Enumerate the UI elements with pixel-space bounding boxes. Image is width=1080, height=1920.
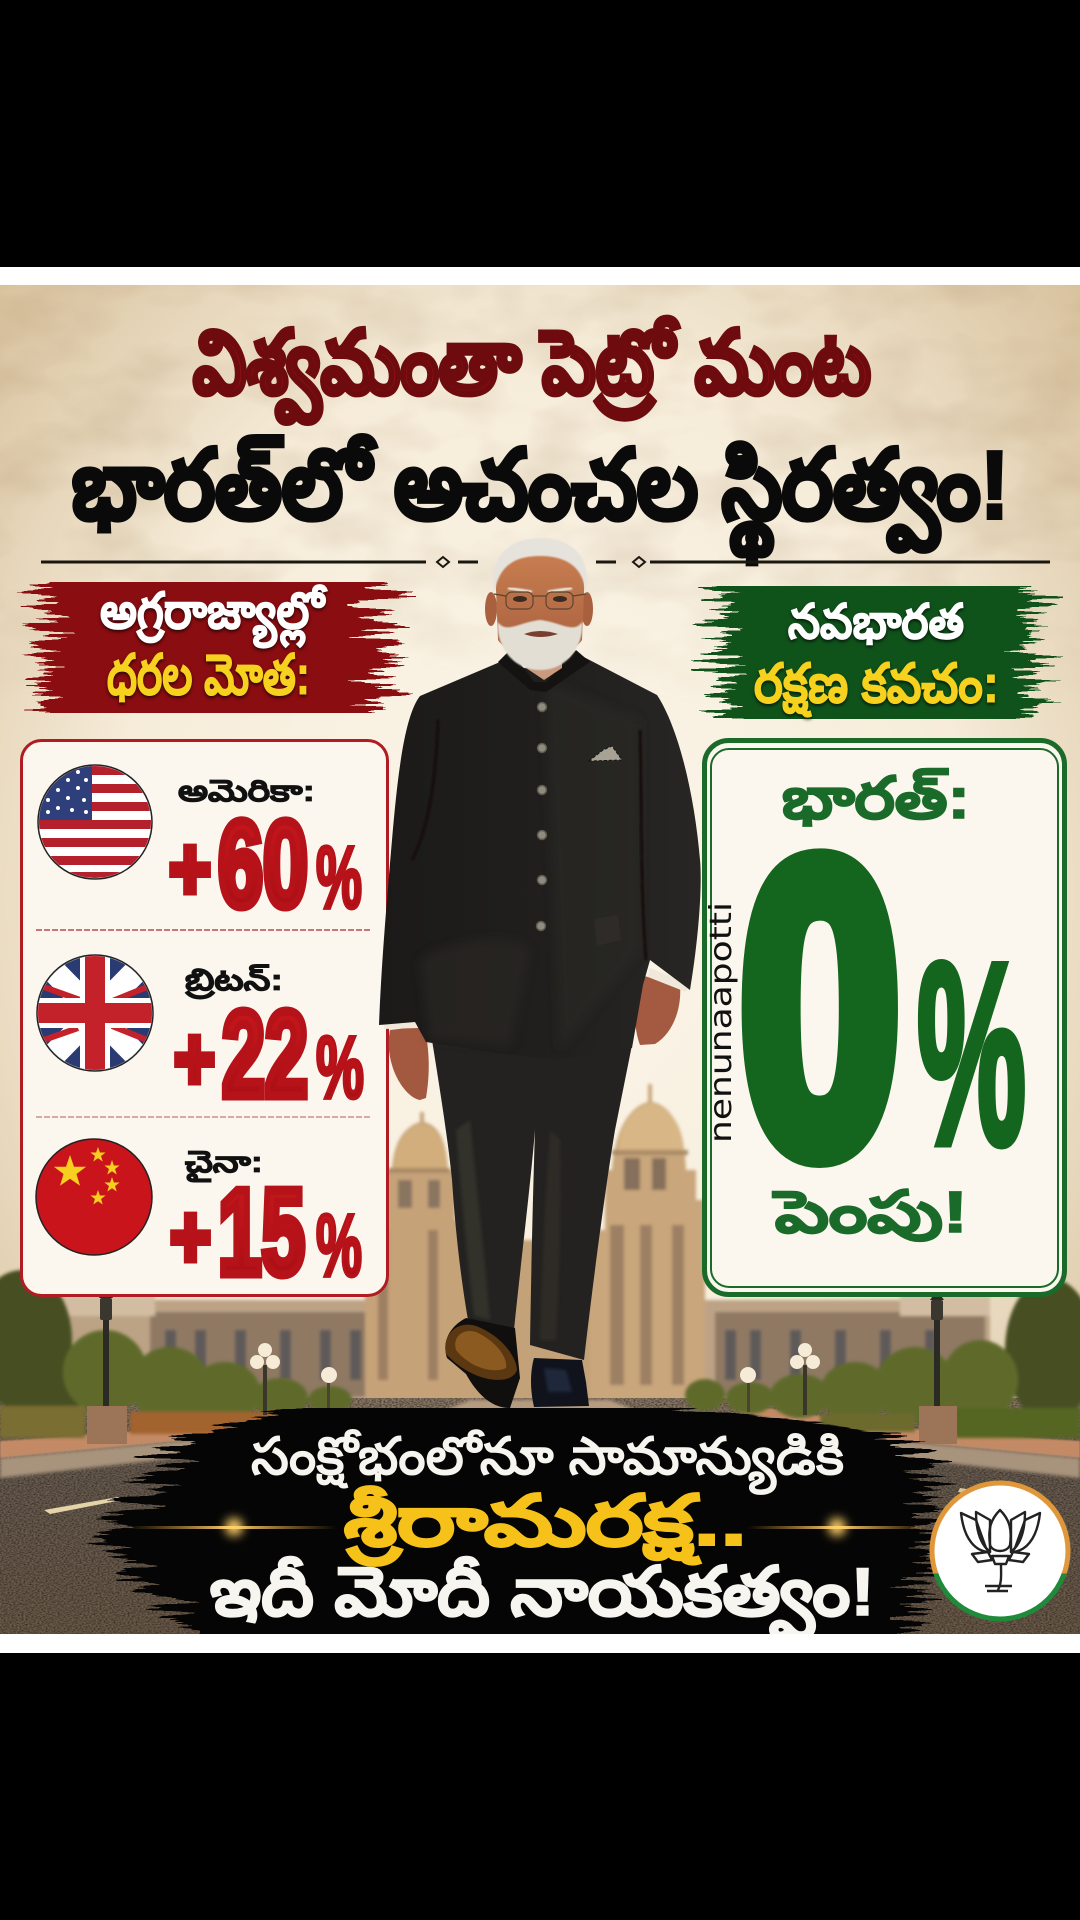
figure: +15%: % xyxy=(316,1196,362,1295)
right tower xyxy=(590,1084,705,1410)
head xyxy=(485,538,593,680)
street lamps xyxy=(87,1284,957,1444)
figure: +60%: 60 xyxy=(218,796,308,932)
beard and moustache xyxy=(498,620,582,670)
banner: new India shield (green brush) xyxy=(722,586,1032,719)
figure: 0: 0 xyxy=(740,778,900,1238)
icon: USA flag xyxy=(38,765,152,881)
centre block xyxy=(468,1238,592,1398)
glowing rule left xyxy=(127,1518,337,1536)
logo: lotus badge xyxy=(932,1483,1068,1619)
banner text line 2: ధరల మోత: xyxy=(107,643,310,706)
figure: leader walking in dark suit xyxy=(379,538,701,1408)
trees and hedges xyxy=(0,1270,1080,1438)
glowing rule right xyxy=(747,1518,930,1536)
banner text line 1: సంక్షోభంలోనూ సామాన్యుడికి xyxy=(251,1428,844,1495)
label: Bharat: భారత్: xyxy=(782,766,970,831)
figure: +15%: 15 xyxy=(218,1164,305,1300)
pocket square xyxy=(589,746,622,761)
label: America: అమెరికా: xyxy=(178,775,315,808)
banner text line 3: ఇదీ మోదీ నాయకత్వం! xyxy=(210,1554,875,1639)
jacket xyxy=(379,654,701,1060)
shoe: right planted xyxy=(531,1358,589,1407)
figure: +22%: 22 xyxy=(222,986,308,1122)
label: China: చైనా: xyxy=(185,1146,263,1183)
figure: +22%: % xyxy=(316,1018,364,1117)
banner text line 1: అగ్రరాజ్యాల్లో xyxy=(100,583,328,649)
icon: China flag xyxy=(36,1139,152,1255)
figure: +22%: + xyxy=(174,1009,215,1108)
label: Britain: బ్రిటన్: xyxy=(185,964,283,1000)
collar xyxy=(498,650,590,692)
jacket buttons xyxy=(536,702,546,930)
road xyxy=(0,1398,1080,1638)
banner text line 2: రక్షణ కవచం: xyxy=(754,654,999,718)
icon: UK flag xyxy=(37,955,153,1071)
shirt cuffs xyxy=(384,1018,418,1029)
shoe: left raised xyxy=(445,1318,520,1408)
banner text line 1: నవభారత xyxy=(788,596,964,649)
ornamental divider xyxy=(41,557,1050,567)
divider xyxy=(36,1116,370,1118)
left tower xyxy=(365,1112,470,1410)
right hand xyxy=(635,975,680,1045)
figure: +15%: + xyxy=(170,1187,211,1286)
title line 1: విశ్వమంతా పెట్రో మంట xyxy=(193,313,871,425)
divider xyxy=(36,929,370,931)
banner text line 2: శ్రీరామరక్ష.. xyxy=(344,1482,747,1566)
figure: +60%: % xyxy=(316,828,362,927)
left hand xyxy=(389,1026,429,1100)
trousers xyxy=(432,1040,632,1360)
icon: lotus xyxy=(961,1510,1040,1591)
background scene xyxy=(0,285,1080,1638)
label: no rise: పెంపు! xyxy=(772,1180,968,1245)
watermark: nenunaapotti xyxy=(704,902,739,1143)
panel: foreign price rises xyxy=(22,740,388,1300)
figure: +60%: + xyxy=(169,819,211,918)
pocket flap xyxy=(594,915,621,946)
parliament building xyxy=(55,1084,990,1410)
glasses xyxy=(494,592,586,609)
banner: superpowers (red brush) xyxy=(42,582,382,713)
bottom banner xyxy=(105,1408,930,1640)
panel: India zero rise xyxy=(704,740,1064,1294)
kerbs xyxy=(0,1408,312,1458)
